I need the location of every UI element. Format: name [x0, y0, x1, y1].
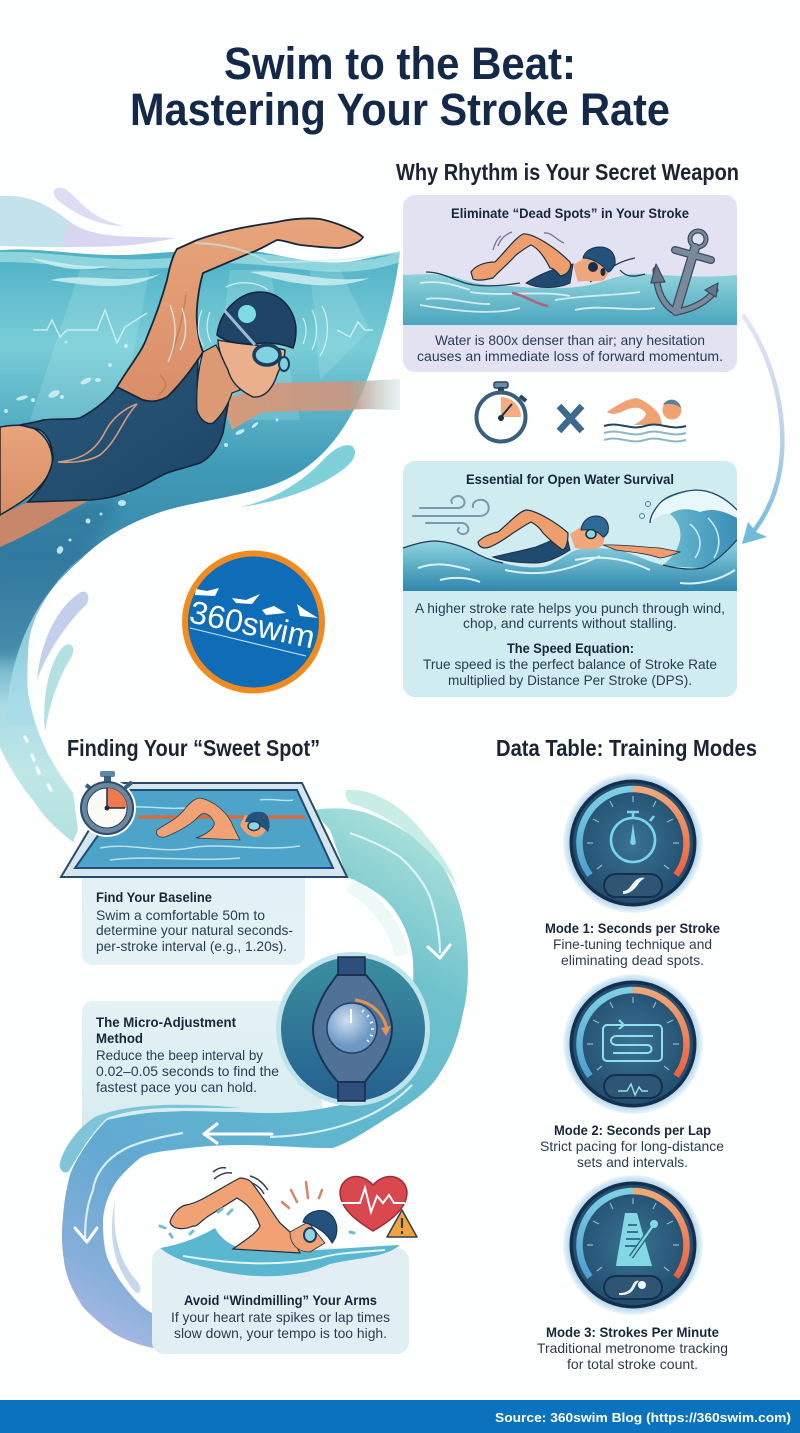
main ribbon band [62, 808, 468, 1353]
neck and chest [197, 345, 240, 423]
mode 2 text: Strict pacing for long-distance [540, 1138, 724, 1154]
watch icon in circle [276, 952, 430, 1106]
pool illustration with stopwatch [61, 771, 347, 877]
mode 1 text: Fine-tuning technique and [553, 936, 712, 952]
water band [403, 274, 737, 325]
decorative arc arrow: right side [742, 315, 782, 544]
mode 3 text: Traditional metronome tracking [537, 1340, 728, 1356]
mode 3 gauge [563, 1175, 703, 1315]
multiply sign [559, 406, 582, 431]
goggles [224, 310, 289, 371]
raised arm and shoulder [117, 218, 363, 401]
baseline text: per-stroke interval (e.g., 1.20s). [96, 938, 287, 954]
pill swimmer icon [623, 878, 645, 894]
mode 3 text: for total stroke count. [567, 1356, 698, 1372]
lower leg [0, 500, 90, 547]
extended arm [222, 379, 400, 430]
panel: essential for open water: The Speed Equation: [507, 640, 634, 656]
dial marker [350, 1009, 352, 1023]
baseline text [96, 889, 293, 954]
panel text: Water is 800x denser than air; any hesitation [435, 332, 705, 348]
flowing ribbon with arrows [60, 790, 468, 1353]
baseline text: determine your natural seconds- [96, 922, 293, 938]
hero water body [0, 249, 400, 842]
pill pulse icon [618, 1084, 648, 1095]
logo underline [190, 628, 306, 656]
swimmer [478, 510, 680, 563]
lap icon [603, 1020, 662, 1061]
panel: eliminate dead spots [403, 195, 737, 372]
ribbon tail tip [60, 1105, 240, 1172]
pool water [75, 790, 333, 868]
panel: avoid windmilling [152, 1168, 417, 1354]
dark wave crest line [426, 258, 645, 286]
title [130, 38, 670, 135]
dial [327, 1003, 377, 1053]
upper leg [0, 425, 52, 515]
pill swimmer icon [619, 1281, 646, 1295]
swimsuit [20, 354, 230, 502]
mode 1 text: eliminating dead spots. [561, 952, 704, 968]
logo swimmers [195, 588, 318, 618]
pool deck [61, 783, 347, 877]
micro-adjustment text: The Micro-Adjustment [96, 1014, 236, 1030]
panel: micro-adjustment method [82, 1001, 322, 1137]
section heading: sweet spot: Finding Your “Sweet Spot” [67, 735, 320, 761]
lane rope [138, 815, 305, 819]
footer bar with source: Source: 360swim Blog (https://360swim.com) [495, 1410, 791, 1425]
mode 1 gauge [563, 773, 703, 913]
panel text: A higher stroke rate helps you punch through wind, [415, 600, 725, 616]
anchor icon [651, 231, 718, 312]
bubbles [4, 340, 278, 555]
windmilling text [171, 1292, 390, 1341]
streak right [350, 833, 440, 953]
windmilling text: Avoid “Windmilling” Your Arms [184, 1292, 377, 1308]
heart icon [338, 1176, 407, 1231]
faint inner arc [350, 885, 402, 955]
arrowhead right [428, 945, 450, 958]
water highlights and rays [0, 252, 400, 790]
micro-adjustment text: 0.02–0.05 seconds to find the [96, 1063, 279, 1079]
suit detail stripe [58, 404, 137, 462]
stopwatch icon [611, 812, 655, 862]
sound waves [168, 283, 327, 362]
arm muscle shading [158, 295, 186, 395]
mode 3 text [537, 1324, 728, 1372]
swim cap [217, 292, 296, 348]
pale swooshes above water [0, 187, 175, 247]
orange adjust arc [355, 1000, 387, 1030]
windmilling text: If your heart rate spikes or lap times [171, 1309, 390, 1325]
arm ripple on water [195, 243, 400, 262]
panel: essential for open water: multiplied by Distance Per Stroke (DPS). [448, 672, 692, 688]
streak lower [85, 1085, 412, 1240]
equation icons: stopwatch times swimmer [476, 382, 686, 442]
arrowhead lower [75, 1228, 97, 1242]
arc tip [381, 1026, 391, 1036]
mode 2 gauge [563, 974, 703, 1114]
section heading: why rhythm: Why Rhythm is Your Secret Weapon [396, 159, 739, 185]
water [403, 540, 737, 591]
dial ticks [362, 1010, 374, 1042]
mode 3 text: Mode 3: Strokes Per Minute [546, 1324, 719, 1340]
small swooshes near logo [37, 592, 88, 732]
micro-adjustment text: Reduce the beep interval by [96, 1047, 263, 1063]
pool swimmer [156, 798, 270, 840]
motion marks [493, 232, 564, 250]
mode 2 text [540, 1122, 724, 1170]
mode 2 text: Mode 2: Seconds per Lap [554, 1122, 711, 1138]
micro-adjustment text [96, 1014, 279, 1095]
cap beeper [238, 305, 256, 323]
baseline text: Swim a comfortable 50m to [96, 907, 265, 923]
small swimmer icon [604, 398, 686, 441]
360swim logo badge [185, 554, 322, 690]
pool stopwatch [78, 771, 136, 837]
panel: eliminate dead spots: causes an immediate loss of forward momentum. [417, 348, 723, 364]
pool ripples [100, 799, 300, 860]
title: Mastering Your Stroke Rate [130, 84, 670, 135]
metronome icon [616, 1213, 658, 1266]
arrowhead left [204, 1124, 272, 1143]
windmilling text: slow down, your tempo is too high. [174, 1325, 387, 1341]
logo wordmark: 360swim [187, 594, 318, 655]
watch body [313, 975, 392, 1082]
mode 2 text: sets and intervals. [577, 1154, 688, 1170]
wave crest line [403, 540, 737, 569]
micro-adjustment text: fastest pace you can hold. [96, 1079, 257, 1095]
title: Swim to the Beat: [224, 38, 576, 89]
strap [338, 957, 365, 1101]
white wave line [0, 248, 400, 261]
panel: essential for open water: chop, and currents without stalling. [463, 615, 677, 631]
motion marks [213, 1168, 268, 1194]
splash highlight [183, 1250, 385, 1263]
teal swoosh lower right [240, 445, 355, 507]
spray droplets [160, 1209, 354, 1237]
water splash on panel [160, 1228, 400, 1276]
panel: essential for open water [403, 461, 737, 697]
mode 1 text [545, 920, 720, 968]
stopwatch icon [476, 382, 526, 442]
panel heading: Essential for Open Water Survival [466, 471, 674, 487]
wind lines icon [413, 496, 489, 534]
footer bar with source [0, 1400, 800, 1433]
panel: essential for open water: True speed is the perfect balance of Stroke Rate [423, 656, 717, 672]
ECG pulse lines [33, 310, 373, 343]
micro-adjustment text: Method [96, 1030, 143, 1046]
face [218, 340, 285, 397]
warning triangle [387, 1210, 417, 1237]
pale ribbon tail [345, 790, 457, 887]
breaking wave [640, 490, 737, 570]
water highlights [418, 556, 735, 583]
hero illustration: swimmer underwater [0, 187, 400, 842]
inner lavender curl [112, 1200, 140, 1293]
windmilling swimmer [170, 1178, 337, 1253]
panel heading: Eliminate “Dead Spots” in Your Stroke [451, 205, 689, 221]
water drag mark [512, 293, 548, 306]
water wave lines [420, 282, 655, 312]
alert marks [282, 1182, 322, 1208]
mode 1 text: Mode 1: Seconds per Stroke [545, 920, 720, 936]
section heading: data table: Data Table: Training Modes [496, 735, 757, 761]
baseline text: Find Your Baseline [96, 889, 212, 905]
panel: find your baseline [82, 870, 305, 965]
swimmer [471, 234, 615, 288]
